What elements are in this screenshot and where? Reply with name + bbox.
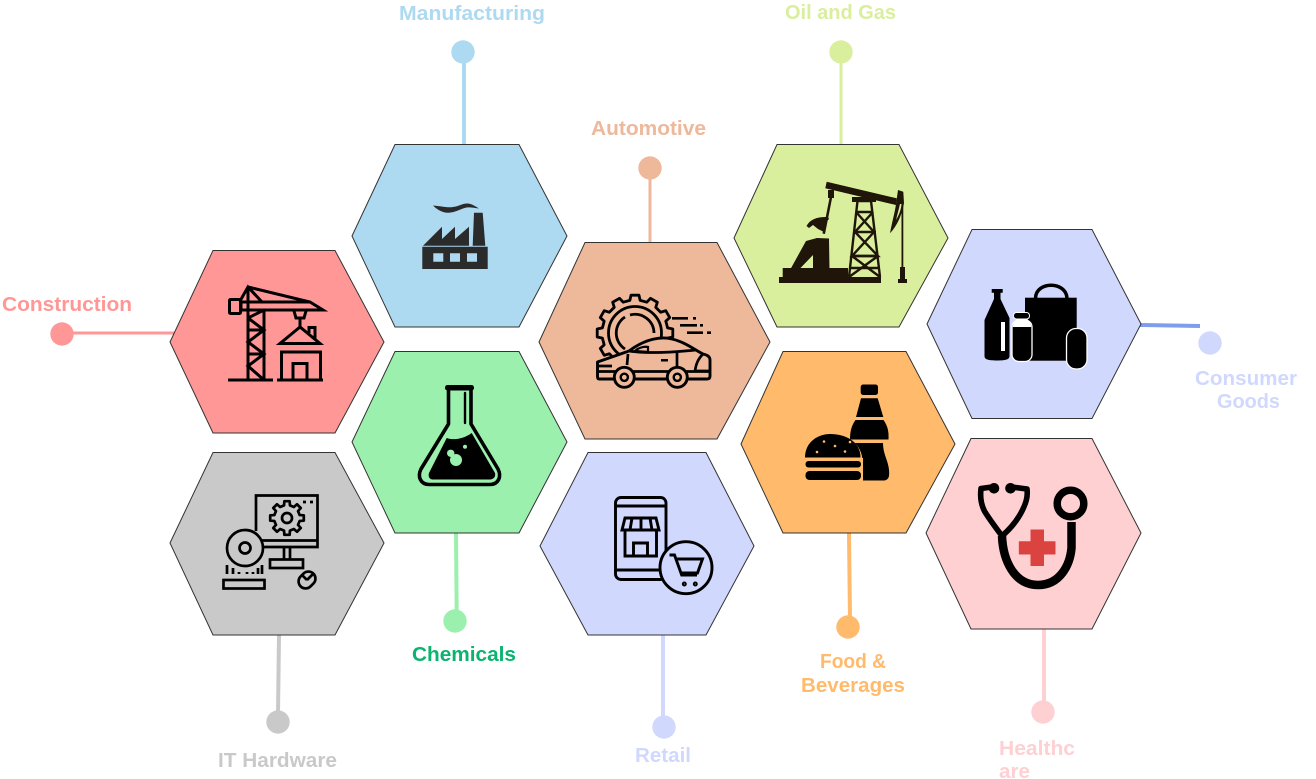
label: chemicals: Chemicals	[412, 644, 516, 666]
hexagon: construction	[170, 250, 384, 433]
connector: it hardware	[278, 635, 279, 714]
hexagon: consumer goods	[927, 230, 1141, 418]
panel: food and beverages	[741, 352, 955, 697]
hexagon: it hardware	[170, 452, 384, 635]
hexagon: automotive	[539, 242, 770, 439]
panel: chemicals	[352, 352, 567, 666]
icon: computer hardware	[224, 496, 318, 591]
label: healthcare: Healthc	[999, 738, 1075, 760]
icon: factory	[422, 203, 488, 269]
connector: construction	[66, 332, 175, 334]
label: retail: Retail	[635, 745, 691, 767]
panel: healthcare	[926, 438, 1141, 779]
hexagon: retail	[540, 452, 754, 635]
connector: oil and gas	[840, 60, 842, 145]
dot: food and beverages	[836, 615, 860, 639]
connector: chemicals	[454, 533, 459, 614]
dot: automotive	[638, 156, 662, 180]
label: consumer goods: Goods	[1217, 391, 1280, 413]
connector: manufacturing	[462, 60, 466, 145]
panel: construction	[2, 250, 384, 433]
dot: retail	[652, 715, 676, 739]
icon: crane and house	[228, 287, 323, 380]
label: consumer goods: Consumer	[1195, 368, 1297, 390]
label: automotive: Automotive	[591, 118, 706, 140]
connector: food and beverages	[849, 533, 850, 620]
label: consumer goods	[1195, 368, 1297, 413]
icon: stethoscope	[981, 483, 1084, 585]
panel: it hardware	[170, 452, 384, 772]
connector: retail	[661, 635, 665, 720]
icon: oil pump	[779, 182, 907, 283]
panel: consumer goods	[927, 230, 1297, 418]
dot: chemicals	[443, 609, 467, 633]
panel: retail	[540, 452, 754, 767]
icon: burger and bottle	[805, 384, 889, 481]
dot: oil and gas	[829, 40, 853, 64]
label: oil and gas: Oil and Gas	[785, 2, 896, 24]
dot: it hardware	[266, 710, 290, 734]
panel: manufacturing	[352, 3, 567, 327]
hexagon: healthcare	[926, 438, 1141, 629]
icon: packaged goods	[984, 285, 1087, 369]
hexagon: manufacturing	[352, 144, 567, 327]
icon: car and gear	[597, 295, 711, 387]
label: healthcare	[999, 738, 1075, 779]
hexagon: oil and gas	[734, 144, 948, 327]
connector: healthcare	[1042, 629, 1046, 705]
panel: oil and gas	[734, 2, 948, 327]
dot: healthcare	[1031, 700, 1055, 724]
hexagon: food and beverages	[741, 352, 955, 533]
connector: consumer goods	[1140, 325, 1200, 326]
label: it hardware: IT Hardware	[218, 750, 337, 772]
hexagon: chemicals	[352, 352, 567, 533]
connector: automotive	[648, 170, 652, 243]
dot: manufacturing	[451, 40, 475, 64]
panel: automotive	[539, 118, 770, 439]
icon: mobile store and cart	[616, 498, 712, 594]
dot: construction	[50, 322, 74, 346]
label: food and beverages: Beverages	[801, 675, 905, 697]
icon: flask	[419, 385, 500, 484]
label: food and beverages	[801, 651, 905, 697]
label: construction: Construction	[2, 294, 132, 316]
label: manufacturing: Manufacturing	[399, 3, 545, 25]
dot: consumer goods	[1198, 331, 1222, 355]
label: food and beverages: Food &	[820, 651, 886, 673]
